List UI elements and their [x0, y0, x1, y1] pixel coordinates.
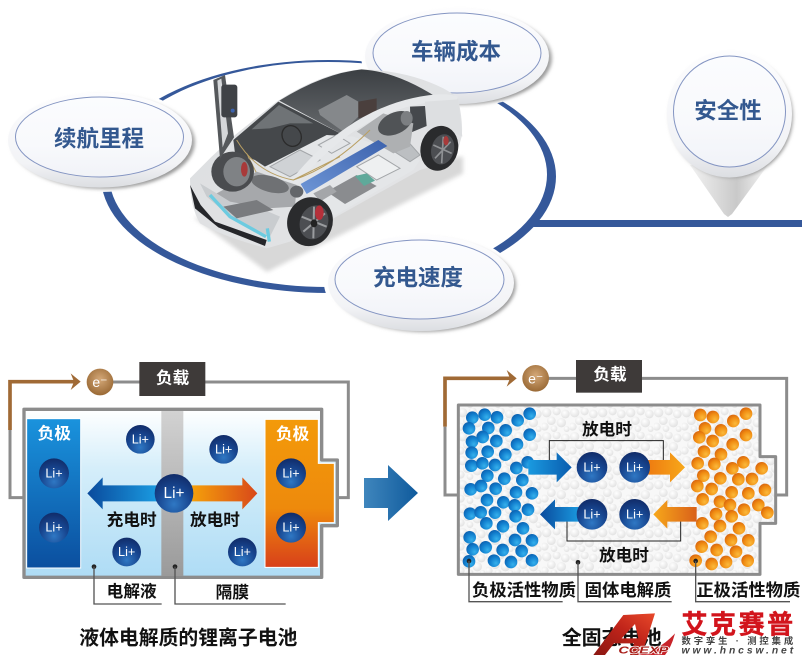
car roof	[279, 69, 437, 135]
external circuit wire	[10, 382, 348, 498]
connector line to safety pin	[533, 220, 802, 227]
right diagram: all-solid-state battery	[445, 360, 800, 656]
lithium ions: Li+	[215, 442, 232, 456]
label: when discharging: 放电时	[190, 510, 240, 529]
electron ball	[87, 369, 113, 395]
lithium ions: Li+	[234, 545, 251, 559]
car cutaway illustration	[190, 69, 463, 272]
negative active material callout	[467, 559, 576, 602]
separator	[161, 411, 183, 576]
label: bottom discharge: 放电时	[599, 546, 649, 565]
battery modules	[313, 173, 377, 204]
right diagram title: 全固态电池	[562, 625, 662, 649]
lithium ions: Li+	[164, 485, 184, 502]
bubble: range	[4, 88, 196, 192]
negative active material callout: 负极活性物质	[472, 580, 576, 600]
battery cell with solid electrolyte	[458, 405, 776, 574]
lithium ions: Li+	[45, 466, 63, 480]
logo mark	[593, 613, 655, 655]
electrolyte callout	[92, 564, 162, 604]
label: top discharge: 放电时	[582, 420, 632, 439]
ring around the car	[101, 60, 556, 293]
rear motor	[357, 106, 416, 153]
arrow: orange leftward	[653, 500, 697, 529]
car shadow	[193, 157, 463, 272]
cabin floor	[265, 135, 420, 218]
watermark logo	[593, 609, 794, 656]
electron current arrow	[445, 370, 517, 427]
pin: safety: 安全性	[694, 98, 762, 124]
positive electrode: 负极	[276, 424, 310, 443]
wiring harness	[237, 130, 370, 193]
load box: 负载	[593, 365, 627, 384]
left diagram: liquid electrolyte lithium-ion battery	[10, 362, 348, 650]
separator callout	[173, 564, 286, 604]
front grille	[190, 185, 267, 246]
solid electrolyte callout	[576, 560, 672, 602]
arrow: orange rightward	[647, 452, 685, 482]
positive electrode	[265, 419, 334, 567]
rear pillar	[293, 98, 457, 183]
charge arrow	[87, 477, 157, 509]
rear body	[425, 99, 462, 137]
floor panels	[270, 135, 420, 180]
electronics box	[318, 95, 377, 132]
external circuit wire	[445, 378, 787, 495]
battery cell	[24, 409, 337, 577]
arrow: blue rightward	[528, 452, 572, 482]
arrow: blue leftward	[540, 499, 580, 529]
front right wheel	[280, 191, 340, 253]
bumper light strip	[210, 195, 269, 242]
label: when charging: 充电时	[107, 509, 157, 529]
logo swoosh	[638, 633, 675, 655]
lithium ions: Li+	[282, 521, 300, 535]
positive active material callout: 正极活性物质	[696, 580, 800, 600]
electron ball: e⁻	[528, 370, 543, 386]
separator callout: 隔膜	[216, 583, 249, 602]
front mechanicals	[217, 171, 303, 218]
top brackets	[549, 441, 663, 462]
hood panel	[200, 183, 280, 237]
blue battery bar	[301, 140, 387, 194]
bubble: range: 续航里程	[54, 126, 144, 152]
windshield reflection	[252, 105, 313, 129]
bubble: vehicle cost: 车辆成本	[411, 40, 501, 64]
solid electrolyte callout: 固体电解质	[585, 580, 671, 600]
lithium ions: Li+	[282, 466, 300, 480]
lithium ions: Li+	[45, 521, 63, 535]
electron ball: e⁻	[92, 374, 108, 390]
positive active material callout	[693, 559, 800, 602]
rear wheel	[415, 122, 463, 175]
electron current arrow	[10, 373, 81, 430]
negative electrode	[27, 419, 81, 568]
load box: 负载	[156, 368, 190, 387]
logo letters: CCEXP	[618, 645, 669, 656]
lithium ions	[39, 425, 306, 566]
electrolyte callout: 电解液	[107, 582, 157, 601]
lithium ions: Li+	[583, 507, 601, 521]
bottom brackets	[567, 519, 681, 541]
load box	[576, 360, 642, 393]
transition arrow	[364, 465, 418, 521]
brand url: www.hncsw.net	[681, 645, 794, 656]
windshield	[233, 102, 343, 167]
bubble: vehicle cost	[361, 4, 553, 108]
front left wheel	[211, 152, 254, 192]
load box	[139, 362, 205, 396]
rear window	[410, 106, 427, 133]
brand name: 艾克赛普	[681, 609, 793, 639]
left diagram title: 液体电解质的锂离子电池	[79, 627, 298, 650]
lithium ions	[577, 452, 650, 530]
lithium ions: Li+	[132, 432, 149, 446]
brand slogan: 数字孪生 · 测控集成	[681, 635, 794, 646]
lithium ions: Li+	[626, 507, 643, 521]
discharge arrow	[192, 477, 257, 509]
charging post	[213, 75, 237, 159]
bubble: charging speed	[324, 231, 518, 335]
lithium ions: Li+	[118, 545, 135, 559]
bubble: charging speed: 充电速度	[373, 266, 463, 290]
negative electrode: 负极	[38, 424, 71, 443]
lithium ions: Li+	[583, 460, 601, 474]
steering wheel	[278, 122, 305, 150]
positive active material particles	[689, 407, 774, 570]
pin: safety	[667, 50, 793, 217]
electron ball	[522, 365, 549, 392]
car body	[190, 69, 462, 248]
lithium ions: Li+	[626, 460, 643, 474]
negative active material particles	[463, 407, 538, 568]
